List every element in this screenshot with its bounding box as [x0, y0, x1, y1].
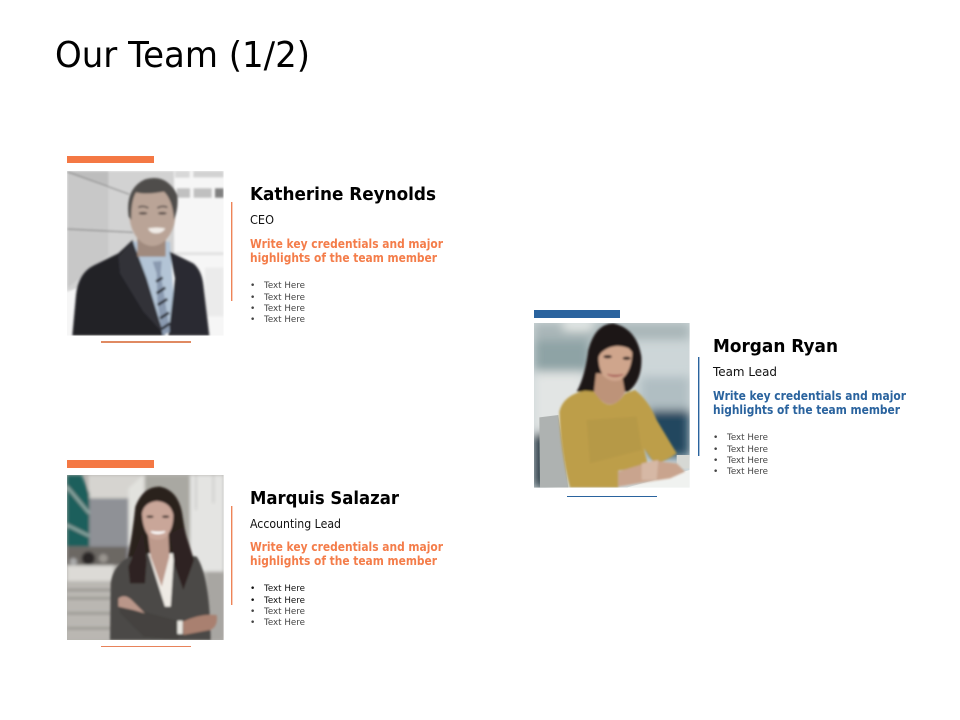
rule: under photo — [101, 341, 191, 343]
hair — [126, 485, 187, 559]
bullet list — [250, 584, 305, 628]
title: Our Team (1/2) — [55, 35, 310, 76]
bullet list: • — [250, 584, 255, 594]
rule: vertical — [698, 357, 699, 456]
blouse — [148, 553, 174, 607]
accent bar: top orange — [67, 460, 154, 468]
rule: under photo — [101, 646, 191, 647]
bullet list: • — [250, 315, 255, 325]
rule: vertical — [231, 506, 232, 605]
panel: Marquis Salazar — [67, 460, 443, 647]
bullet list: • — [250, 304, 255, 314]
bullet list: Text Here — [263, 596, 305, 606]
bullet list: • — [713, 467, 718, 477]
accent bar: top orange — [67, 156, 154, 163]
bullet list: • — [250, 618, 255, 628]
blazer — [110, 553, 211, 640]
bullet list: • — [713, 433, 718, 443]
face — [599, 346, 632, 381]
name: Morgan Ryan — [713, 336, 838, 357]
name: Katherine Reynolds — [250, 184, 436, 205]
bullet list: • — [250, 596, 255, 606]
bullet list: Text Here — [263, 281, 305, 291]
bullet list: Text Here — [263, 304, 305, 314]
name: Marquis Salazar — [250, 488, 399, 509]
role: Team Lead — [712, 365, 777, 379]
desk — [627, 470, 690, 488]
bullet list: Text Here — [263, 584, 305, 594]
credentials text: highlights of the team member — [713, 403, 900, 417]
bullet list: Text Here — [263, 315, 305, 325]
face — [142, 501, 173, 540]
role: CEO — [250, 213, 274, 227]
neck and chest — [594, 373, 625, 404]
bullet list: • — [250, 293, 255, 303]
chair — [539, 415, 568, 488]
panel: Katherine Reynolds — [67, 156, 443, 343]
photo: woman in yellow sweater — [534, 323, 690, 488]
credentials text: highlights of the team member — [250, 554, 437, 568]
bullet list: • — [250, 281, 255, 291]
bullet list: Text Here — [263, 607, 305, 617]
neck — [147, 530, 169, 587]
bullet list: Text Here — [726, 467, 768, 477]
tie — [153, 261, 170, 336]
bullet list — [250, 281, 305, 325]
hands and forearm — [618, 461, 685, 487]
bullet list — [713, 433, 768, 477]
panel: Morgan Ryan — [534, 310, 906, 497]
photo: woman in grey blazer — [67, 475, 224, 640]
photo: man in suit — [67, 171, 224, 336]
bullet list: Text Here — [726, 456, 768, 466]
role: Accounting Lead — [250, 517, 341, 531]
accent bar: top blue — [534, 310, 620, 318]
rule: under photo — [567, 496, 657, 497]
bullet list: Text Here — [263, 618, 305, 628]
bullet list: • — [250, 607, 255, 617]
neck and shirt — [132, 242, 176, 332]
arms — [118, 600, 182, 640]
bullet list: • — [713, 445, 718, 455]
bullet list: Text Here — [263, 293, 305, 303]
rule: vertical — [231, 202, 232, 301]
bullet list: Text Here — [726, 433, 768, 443]
bullet list: • — [713, 456, 718, 466]
suit — [72, 240, 165, 336]
credentials text: Write key credentials and major — [250, 237, 443, 251]
hair front — [128, 537, 194, 589]
sweater — [559, 390, 677, 488]
bullet list: Text Here — [726, 445, 768, 455]
credentials text: Write key credentials and major — [713, 389, 906, 403]
credentials text: Write key credentials and major — [250, 540, 443, 554]
hair back — [577, 323, 641, 392]
head — [136, 238, 167, 258]
credentials text: highlights of the team member — [250, 251, 437, 265]
